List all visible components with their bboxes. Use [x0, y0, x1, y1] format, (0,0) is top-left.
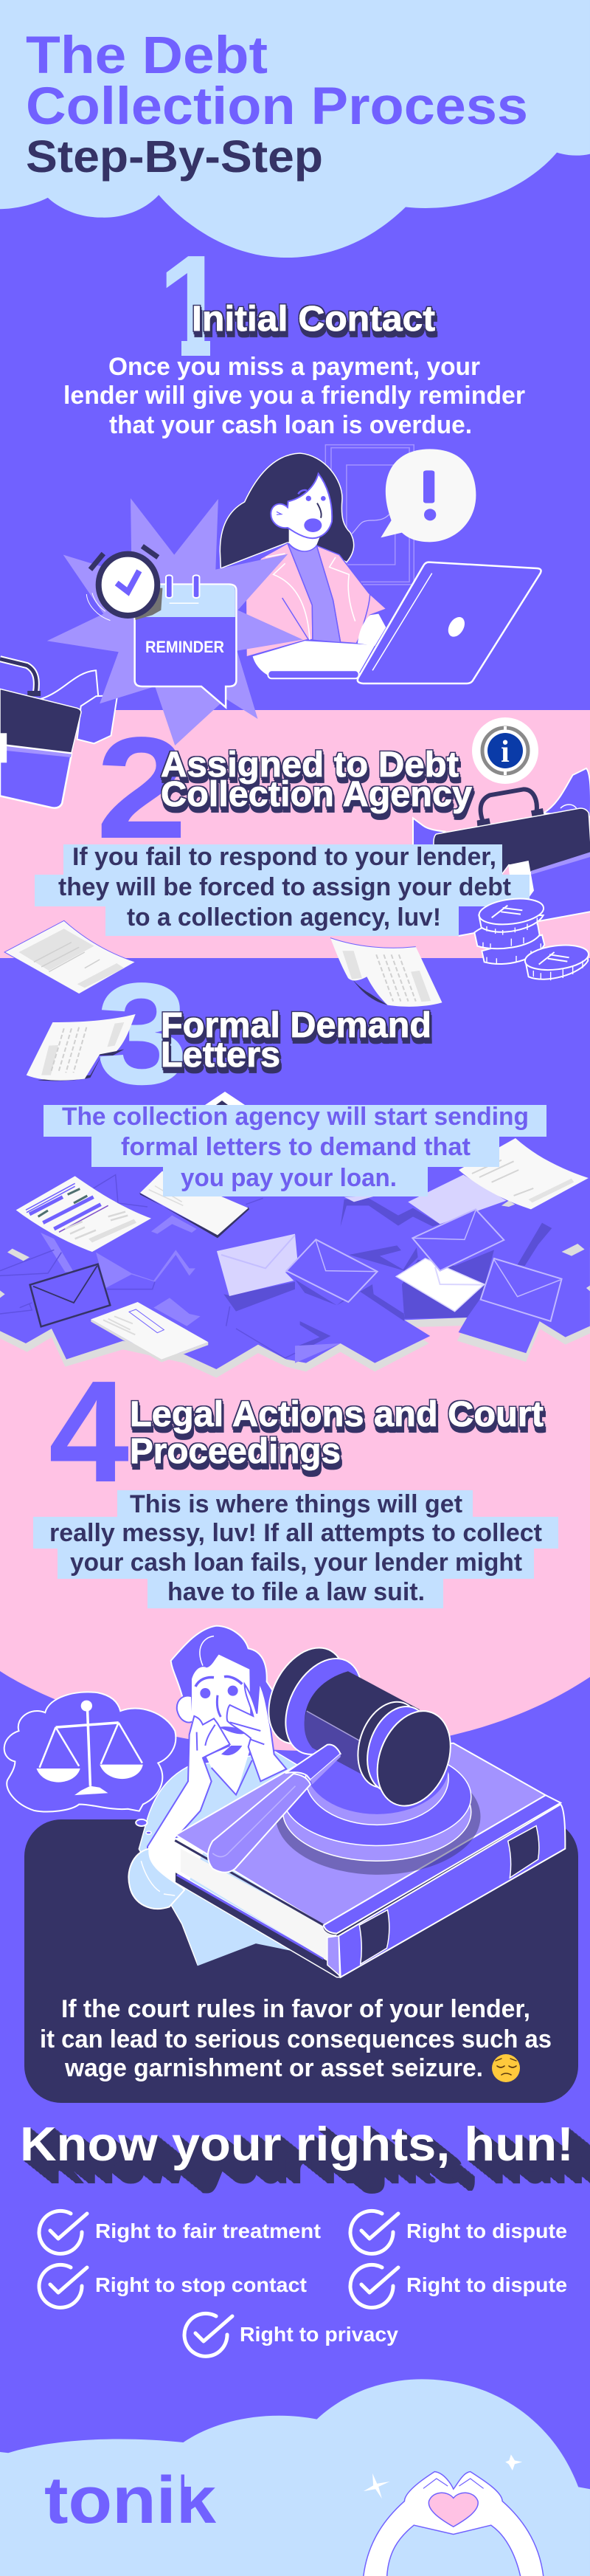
step 3 text: formal letters to demand that — [121, 1133, 471, 1161]
icon: coins — [474, 895, 590, 980]
illustration: envelope pile — [0, 1138, 590, 1378]
document: left paper — [4, 920, 136, 994]
scraps — [0, 1244, 590, 1298]
right: stop contact — [39, 2265, 307, 2307]
step 2 number: 2 — [96, 707, 187, 869]
card text: wage garnishment or asset seizure. — [64, 2054, 483, 2082]
right: dispute again — [350, 2265, 567, 2307]
icon: info badge — [472, 717, 538, 784]
eyes and brows — [200, 1688, 210, 1698]
block shadow — [276, 1758, 481, 1875]
heading: know your rights: Know your rights, hun! — [20, 2117, 574, 2171]
step 1 text — [63, 353, 525, 439]
step 2 heading: Assigned to Debt — [161, 745, 459, 785]
step 1 text: lender will give you a friendly reminder — [63, 382, 525, 410]
illustration: lap and laptop — [253, 562, 541, 683]
calendar note — [135, 575, 236, 707]
spine — [339, 1805, 565, 1977]
lap — [253, 641, 375, 675]
laptop lid — [358, 562, 541, 683]
title — [26, 27, 528, 182]
faint envelopes — [41, 1216, 341, 1363]
laptop base — [268, 670, 359, 678]
paper: printed form — [16, 1176, 151, 1252]
right: privacy: Right to privacy — [240, 2323, 398, 2346]
right: stop contact: Right to stop contact — [95, 2273, 307, 2296]
right: fair treatment — [39, 2211, 321, 2253]
step 4 number: 4 — [49, 1351, 129, 1512]
right: dispute again: Right to dispute — [406, 2273, 567, 2296]
envelope tip above text box — [205, 1092, 245, 1105]
document: curled paper — [330, 938, 442, 1007]
ear — [177, 1696, 193, 1723]
step 3 text — [44, 1103, 546, 1196]
title: Collection Process — [26, 78, 528, 136]
panel: lower purple dome — [0, 1671, 590, 2576]
letter: white envelope — [139, 1171, 249, 1238]
face — [271, 474, 332, 538]
step 2 heading: Collection Agency — [161, 775, 472, 814]
hair — [171, 1626, 274, 1727]
step 1 text: Once you miss a payment, your — [108, 353, 480, 381]
illustration: worried man — [139, 1626, 330, 1965]
step 3 text: The collection agency will start sending — [62, 1103, 529, 1131]
card text: If the court rules in favor of your lender, — [61, 1995, 530, 2023]
step 3 heading — [161, 1006, 431, 1075]
step 4 text — [33, 1490, 558, 1608]
step 1 text: that your cash loan is overdue. — [109, 411, 472, 439]
shirt — [139, 1752, 330, 1965]
rights list — [39, 2211, 567, 2356]
step 4 text: really messy, luv! If all attempts to collect — [49, 1519, 542, 1547]
letter: bottom white — [91, 1302, 208, 1363]
sparkles — [505, 2454, 522, 2470]
letter: lilac envelope, top right — [408, 1175, 507, 1224]
header cloud — [0, 0, 590, 258]
shirt — [288, 543, 341, 643]
icon: info badge: i — [501, 735, 510, 769]
step 4 heading: Legal Actions and Court — [130, 1395, 544, 1434]
right hand — [227, 1683, 286, 1781]
illustration: heart hands — [363, 2454, 544, 2576]
speech bubble — [381, 449, 476, 542]
forearm — [148, 1838, 211, 1890]
page block — [181, 1849, 337, 1960]
neck — [289, 526, 319, 551]
top cover — [176, 1743, 546, 1925]
illustration: woman — [220, 453, 386, 657]
face — [192, 1655, 251, 1796]
reminder label: REMINDER — [145, 638, 224, 656]
illustration: law book — [129, 1743, 565, 1977]
document: paper by step 3 — [27, 1014, 136, 1081]
pile edge shadow — [0, 1247, 590, 1378]
step 1 number: 1 — [158, 225, 228, 387]
illustration: gavel and block — [208, 1640, 481, 1875]
right: privacy — [184, 2313, 398, 2356]
envelope: outlined right — [481, 1258, 562, 1321]
icon: pensive emoji — [492, 2054, 520, 2082]
panel: step 4 pink band — [0, 1284, 590, 1757]
illustration: right briefcase — [413, 768, 590, 936]
illustration: starburst with alarm clock and reminder — [47, 498, 303, 745]
illustration: left briefcase — [0, 659, 117, 808]
card text: it can lead to serious consequences such as — [40, 2025, 552, 2053]
starburst — [47, 498, 303, 745]
envelope: outlined top right — [412, 1209, 504, 1271]
arm — [358, 614, 386, 646]
arm sleeve — [129, 1849, 184, 1909]
right: dispute: Right to dispute — [406, 2219, 567, 2242]
panel: dark consequence card — [24, 1819, 578, 2103]
step 2 text: If you fail to respond to your lender, — [72, 843, 496, 871]
illustration: thought bubble with scales — [4, 1692, 176, 1834]
step 3 heading: Letters — [161, 1036, 280, 1075]
step 3 number: 3 — [96, 953, 189, 1115]
hair — [220, 453, 354, 568]
gavel head — [255, 1640, 358, 1752]
window frame — [325, 445, 414, 585]
title: The Debt — [26, 27, 268, 85]
alarm clock — [86, 546, 162, 621]
step 4 heading — [130, 1395, 544, 1471]
step 4 text: your cash loan fails, your lender might — [70, 1549, 522, 1577]
step 2 heading — [161, 745, 472, 814]
illustration: window and speech bubble — [325, 445, 476, 585]
step 3 heading: Formal Demand — [161, 1006, 431, 1045]
dark shadows — [223, 1198, 552, 1354]
lower cover — [175, 1872, 341, 1977]
step 3 text: you pay your loan. — [181, 1164, 397, 1192]
left hand and arm — [148, 1716, 230, 1870]
sound block — [283, 1763, 471, 1861]
logo: tonik: tonik — [44, 2464, 217, 2538]
gavel handle — [285, 1744, 341, 1780]
panel: step 2 pink band — [0, 710, 590, 958]
step 1 heading: Initial Contact — [192, 300, 435, 339]
title: Step-By-Step — [26, 131, 323, 182]
footer cloud — [0, 2379, 590, 2576]
jacket — [246, 543, 313, 657]
paper: right — [459, 1138, 589, 1209]
envelope: outlined centre — [286, 1239, 378, 1302]
envelope: navy outline left — [30, 1264, 110, 1326]
right: dispute — [350, 2211, 567, 2253]
card text — [40, 1995, 552, 2082]
step 4 heading: Proceedings — [130, 1432, 341, 1471]
envelope: lilac centre — [217, 1234, 299, 1296]
envelope: white — [396, 1258, 485, 1312]
right: fair treatment: Right to fair treatment — [95, 2219, 321, 2242]
pile edge — [0, 1247, 590, 1369]
step 4 text: have to file a law suit. — [167, 1578, 425, 1606]
step 2 text: they will be forced to assign your debt — [58, 873, 511, 901]
letter: lilac peek — [344, 1196, 376, 1202]
step 2 text — [35, 843, 530, 936]
shirt tail — [185, 1869, 324, 1966]
icon: scales — [36, 1701, 143, 1795]
step 2 text: to a collection agency, luv! — [127, 903, 441, 931]
step 4 text: This is where things will get — [130, 1490, 462, 1518]
